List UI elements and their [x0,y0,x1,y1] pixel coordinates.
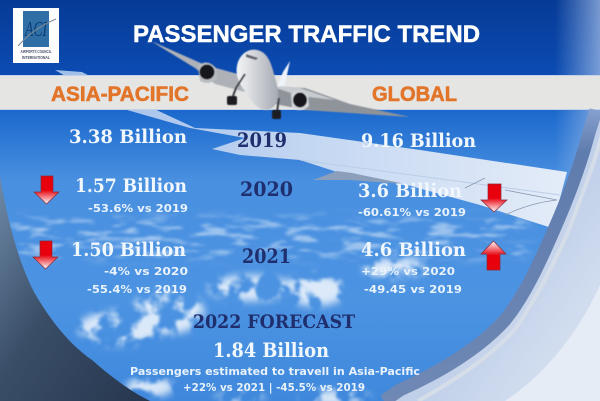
year 2020 row: 2020 [240,177,293,201]
year 2021 row: -55.4% vs 2019 [87,283,187,296]
year 2021 row: +29% vs 2020 [361,265,455,278]
column heading: Asia-Pacific: ASIA-PACIFIC [51,82,189,106]
year 2021 row [71,239,466,296]
thin horizon clouds [10,218,530,258]
year 2020 row: 1.57 Billion [75,175,187,197]
ACI logo: ACI [24,17,48,41]
window frame: right side [384,110,600,401]
year 2021 row: 1.50 Billion [71,239,186,261]
year 2020 row: -60.61% vs 2019 [358,206,466,219]
year 2020 row [75,175,466,219]
wing left [151,41,245,92]
cloud layer [10,218,530,401]
2022 forecast block: 1.84 Billion [213,338,329,362]
year 2020 row: 3.6 Billion [358,180,462,202]
year 2021 row: -4% vs 2020 [104,265,188,278]
wing right [268,86,410,117]
year 2020 row: -53.6% vs 2019 [88,202,188,215]
fuselage [237,50,278,110]
year 2019 row: 3.38 Billion [69,126,187,148]
column heading: Global: GLOBAL [372,82,457,106]
icon: down arrow Global 2020 [481,184,507,212]
icon: up arrow Global 2021 [481,241,506,270]
window frame: left side [0,176,150,401]
icon: down arrow Asia-Pacific 2021 [33,241,58,269]
2022 forecast block: +22% vs 2021 | -45.5% vs 2019 [183,381,365,394]
landing gear [233,74,245,96]
aircraft wing [55,70,567,228]
year 2021 row: -49.45 vs 2019 [364,283,462,296]
engine right [291,91,309,110]
year 2019 row [69,126,476,152]
engine left [198,62,217,83]
year 2021 row: 2021 [242,244,291,268]
2022 forecast block: Passengers estimated to travell in Asia-Pacific [130,365,420,378]
2022 forecast block [130,311,420,394]
header band [0,75,600,110]
title: PASSENGER TRAFFIC TREND [133,21,480,48]
cumulus clouds [78,258,427,401]
icon: down arrow Asia-Pacific 2020 [34,176,59,204]
tail fin [275,61,290,92]
year 2019 row: 2019 [237,128,287,152]
2022 forecast block: 2022 FORECAST [193,311,355,333]
year 2019 row: 9.16 Billion [361,130,476,152]
ACI logo [13,8,59,63]
ACI logo: AIRPORTS COUNCIL [20,49,52,54]
airplane [151,41,410,119]
ACI logo: INTERNATIONAL [22,55,50,60]
year 2021 row: 4.6 Billion [361,239,466,261]
